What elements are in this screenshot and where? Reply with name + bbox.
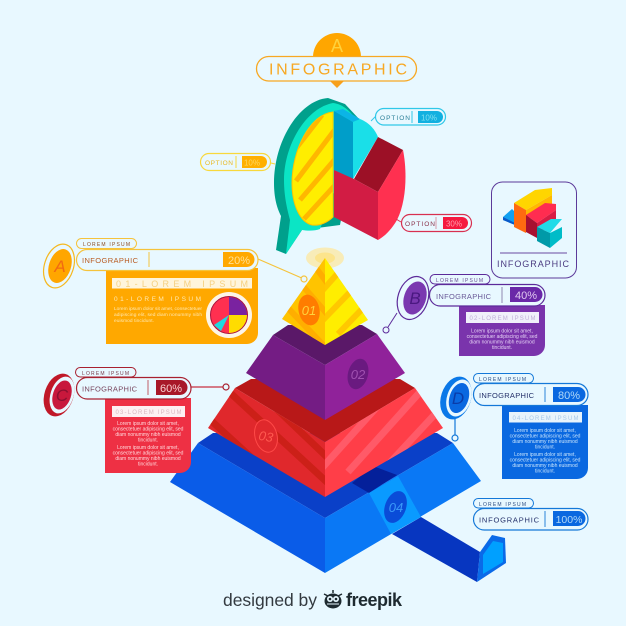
panel 100% — [474, 498, 588, 530]
text D: diam nonummy nibh euismod — [512, 463, 578, 469]
main pill A: 20% — [228, 255, 250, 267]
badge D: D — [452, 389, 464, 408]
level 04: blue: 04 — [389, 500, 403, 515]
text D — [510, 428, 581, 474]
main pill 100%: INFOGRAPHIC — [479, 516, 540, 524]
badge D — [435, 372, 477, 424]
title: INFOGRAPHIC — [269, 62, 407, 78]
option yellow 10% — [200, 154, 275, 170]
text B — [467, 328, 538, 351]
text D: consectetuer adipiscing elit, sed — [510, 458, 581, 464]
main pill D — [474, 384, 588, 406]
option red 30%: OPTION — [405, 221, 435, 228]
inset card: 3D blocks: INFOGRAPHIC — [497, 259, 570, 269]
option red 30%: 30% — [446, 220, 462, 228]
badge C — [38, 370, 80, 420]
panel C — [38, 368, 229, 473]
pie chart A — [206, 292, 252, 338]
panel D — [435, 372, 588, 479]
label pill A: LOREM IPSUM — [83, 242, 130, 248]
yellow half with stripes — [292, 112, 336, 225]
body B — [459, 305, 545, 356]
main pill A — [76, 250, 258, 270]
white bar A: 01-LOREM IPSUM — [116, 279, 248, 289]
text A: Lorem ipsum dolor sit amet, consectetuer — [114, 306, 202, 312]
text A — [114, 296, 202, 324]
text D: Lorem ipsum dolor sit amet, — [514, 428, 576, 434]
freepik credit — [223, 590, 403, 610]
main pill 100% — [474, 508, 588, 530]
white bar B: 02-LOREM IPSUM — [470, 316, 536, 322]
text D: tincidunt. — [535, 468, 555, 474]
red wedge — [334, 137, 405, 240]
text D: Lorem ipsum dolor sit amet, — [514, 452, 576, 458]
main pill B: INFOGRAPHIC — [436, 292, 492, 301]
level 01: yellow: 01 — [302, 303, 316, 318]
level 03: red: 03 — [257, 428, 275, 445]
label pill C: LOREM IPSUM — [82, 371, 129, 377]
text D: consectetuer adipiscing elit, sed — [510, 434, 581, 440]
text A: euismod tincidunt. — [114, 318, 154, 324]
body D — [502, 405, 588, 479]
level 04: blue — [170, 433, 506, 582]
connector B — [383, 313, 397, 333]
freepik credit: designed by — [223, 590, 317, 610]
icon: freepik mascot — [324, 590, 342, 608]
text B: consectetuer adipiscing elit, sed — [467, 334, 538, 340]
text C: Lorem ipsum dolor sit amet, — [117, 445, 179, 451]
label pill D: LOREM IPSUM — [479, 377, 526, 383]
freepik credit: freepik — [346, 590, 403, 610]
panel A — [38, 238, 307, 344]
label pill C — [76, 368, 136, 377]
text C: consectetuer adipiscing elit, sed — [113, 450, 184, 456]
connector C — [191, 384, 229, 390]
label pill D — [474, 374, 534, 383]
main pill D: INFOGRAPHIC — [479, 391, 535, 400]
connector A — [258, 259, 307, 282]
text D: tincidunt. — [535, 444, 555, 450]
connector D — [452, 419, 458, 441]
white bar C: 03-LOREM IPSUM — [116, 410, 182, 416]
text A: 01-LOREM IPSUM — [114, 296, 201, 303]
main pill B: 40% — [515, 290, 537, 302]
inset card: 3D blocks — [492, 182, 576, 278]
text B: diam nonummy nibh euismod — [469, 340, 535, 346]
main pill D: 80% — [558, 390, 580, 402]
level 02: purple: 02 — [351, 367, 366, 382]
level 01: yellow — [282, 248, 368, 350]
white bar D: 04-LOREM IPSUM — [512, 416, 578, 422]
text A: adipiscing elit, sed diam nonummy nibh — [114, 312, 202, 318]
badge C: C — [56, 386, 69, 405]
speech bubble pie chart — [274, 98, 405, 254]
white bar C — [112, 406, 185, 417]
text C: consectetuer adipiscing elit, sed — [113, 426, 184, 432]
text C: diam nonummy nibh euismod — [115, 456, 181, 462]
option red 30% — [396, 214, 472, 232]
level 03: red — [208, 379, 443, 497]
panel B — [383, 272, 545, 356]
title — [256, 33, 416, 88]
main pill A: INFOGRAPHIC — [82, 256, 139, 265]
main pill B — [430, 284, 545, 306]
level 02: purple — [246, 325, 405, 420]
main pill 100%: 100% — [556, 514, 582, 526]
main pill C — [76, 378, 191, 399]
white bar B — [466, 312, 539, 323]
label pill B — [430, 274, 490, 284]
text C: diam nonummy nibh euismod — [115, 432, 181, 438]
badge B: B — [409, 289, 421, 308]
label pill 100%: LOREM IPSUM — [479, 502, 526, 508]
option cyan 10% — [371, 108, 446, 125]
badge A: A — [53, 257, 66, 276]
title: A — [331, 36, 343, 56]
text D: diam nonummy nibh euismod — [512, 439, 578, 445]
text C: tincidunt. — [138, 438, 158, 444]
badge B — [392, 272, 434, 324]
option cyan 10%: OPTION — [380, 115, 410, 122]
text B: Lorem ipsum dolor sit amet, — [471, 328, 533, 334]
text C: tincidunt. — [138, 462, 158, 468]
badge A — [38, 240, 80, 292]
blue wedge — [334, 109, 378, 179]
option yellow 10%: 10% — [244, 158, 260, 168]
pyramid — [170, 248, 506, 582]
option yellow 10%: OPTION — [205, 160, 233, 167]
body C — [105, 398, 191, 473]
white bar D — [509, 412, 582, 422]
main pill C: INFOGRAPHIC — [82, 384, 138, 394]
text B: tincidunt. — [492, 345, 512, 351]
option cyan 10%: 10% — [421, 114, 437, 122]
label pill A — [76, 238, 136, 248]
text C: Lorem ipsum dolor sit amet, — [117, 421, 179, 427]
body A — [106, 268, 258, 344]
main pill C: 60% — [160, 383, 182, 395]
text C — [113, 421, 184, 468]
label pill B: LOREM IPSUM — [436, 278, 483, 284]
